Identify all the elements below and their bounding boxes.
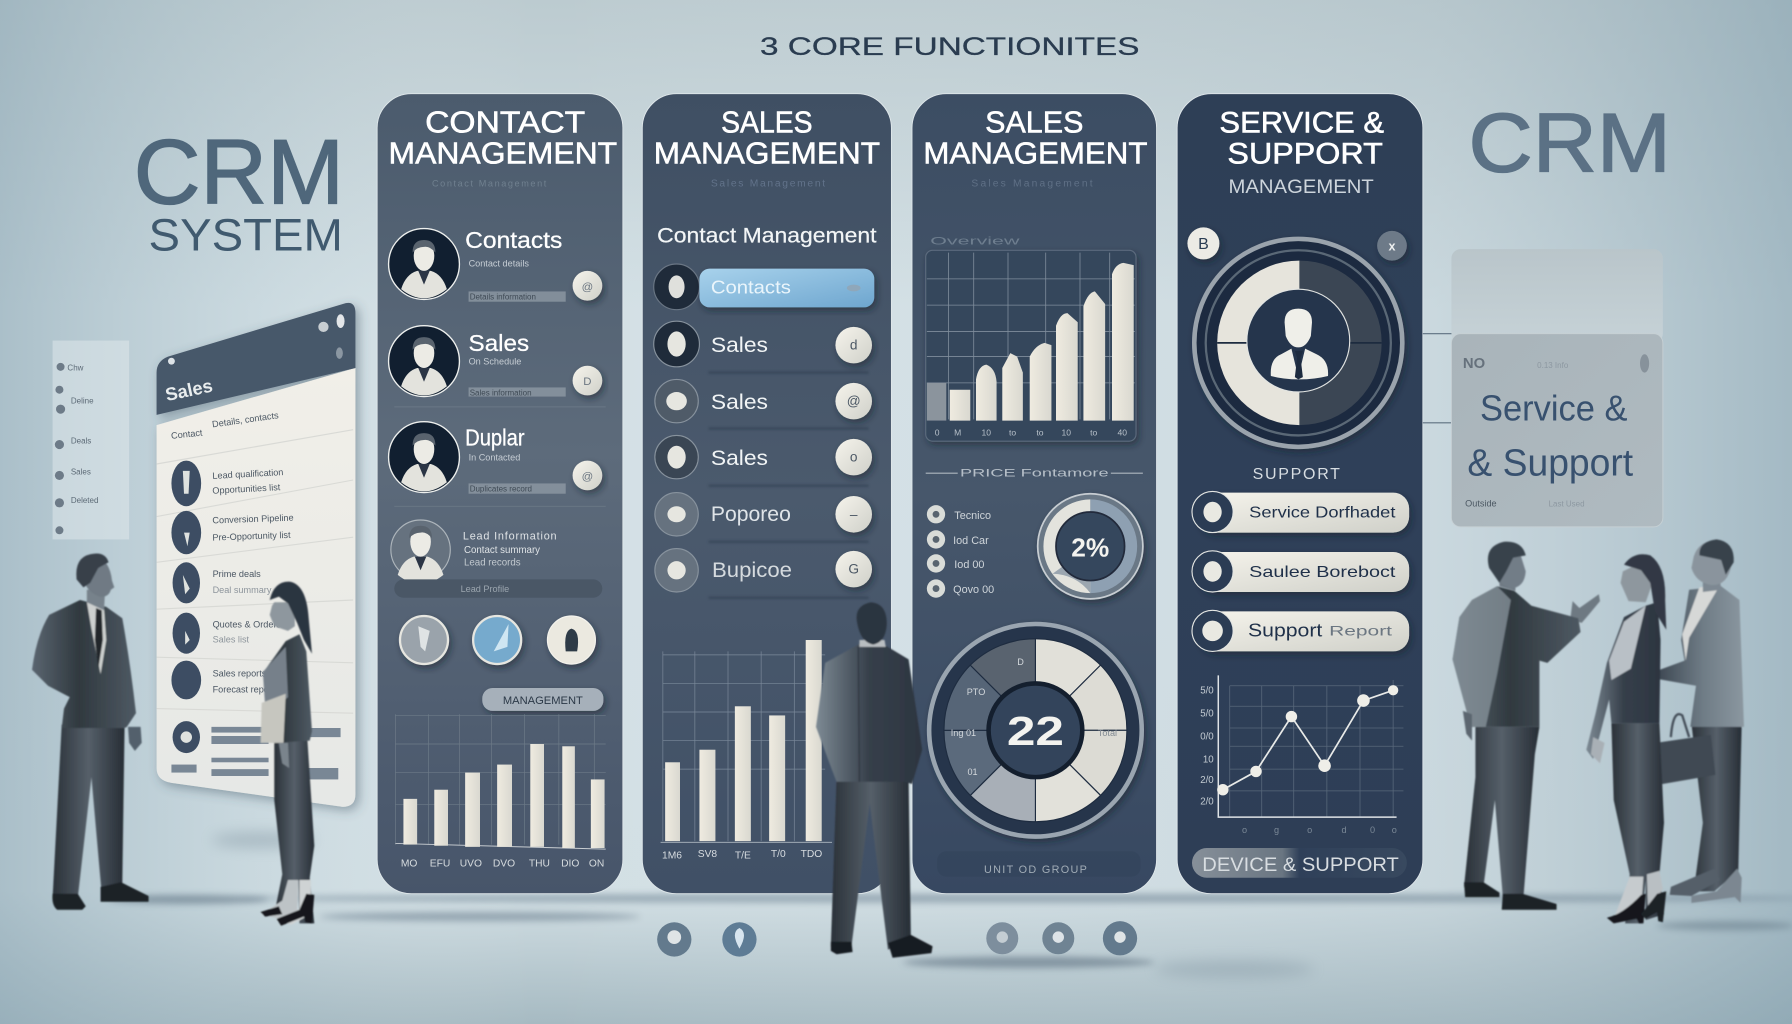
sales rows: o [850, 450, 858, 465]
floor shadows [109, 832, 1792, 978]
heading: CRM System: SYSTEM [149, 209, 343, 260]
window rows: Lead qualification [212, 467, 284, 481]
window rows: Conversion Pipeline [212, 513, 294, 525]
window rows: Forecast report [213, 685, 275, 695]
line chart: 2/0 [1200, 797, 1214, 808]
big dial: 22 [929, 624, 1142, 837]
callout card: service and support: Service & [1480, 388, 1627, 429]
bar chart: contacts: DIO [561, 858, 579, 869]
figure: man with hand in pocket [32, 553, 149, 910]
contact rows: Sales [469, 330, 529, 356]
big dial: 22: 22 [1007, 708, 1064, 754]
figure: man viewed from behind [816, 602, 933, 958]
panel title: SERVICE & [1219, 107, 1384, 140]
callout card: service and support: NO [1463, 356, 1485, 372]
big dial: 22: Ing 01 [951, 728, 976, 738]
window rows: Deal summary [213, 585, 272, 595]
panel title: MANAGEMENT [923, 135, 1148, 170]
growth bar chart [926, 250, 1136, 441]
line chart: o [1307, 825, 1312, 835]
line chart: 10 [1203, 754, 1214, 765]
sales rows: Sales [711, 389, 768, 414]
window rows: Opportunities list [212, 482, 281, 496]
panel: floating sales window [157, 303, 355, 807]
big dial: 22: PTO [967, 687, 985, 697]
panel title: MANAGEMENT [389, 135, 617, 170]
connector lines [1423, 334, 1454, 423]
panel: faint side list: Deline [71, 396, 94, 405]
callout card: service and support: & Support [1467, 441, 1634, 483]
panel: sales management analytics [912, 94, 1157, 894]
big dial: 22: 01 [967, 767, 978, 777]
growth bar chart: 0 [935, 427, 940, 437]
dial segments [944, 639, 1127, 822]
contact row active: Contacts [711, 277, 791, 298]
panel: faint side list: Deals [71, 436, 91, 445]
sales rows: Sales [711, 332, 768, 357]
lead card: Lead Information [463, 530, 557, 542]
dial caption: UNIT OD GROUP [984, 864, 1087, 876]
window rows: Pre-Opportunity list [212, 530, 291, 543]
growth bar chart: M [954, 427, 961, 437]
sales rows: Sales [711, 445, 768, 470]
bar chart: contacts [395, 714, 606, 869]
faint subtitle: Sales Management [711, 178, 825, 189]
legend: Qovo 00 [953, 584, 994, 596]
lead card: Contact summary [464, 545, 540, 556]
line chart: 5/0 [1200, 709, 1214, 720]
person icon [1271, 309, 1328, 379]
legend [927, 505, 994, 598]
contact rows: Duplicates record [470, 484, 532, 493]
contact rows: D [583, 376, 592, 388]
donut: 2%: 2% [1071, 533, 1109, 563]
action buttons [400, 616, 595, 664]
management pill: MANAGEMENT [503, 695, 583, 707]
callout card: service and support: Outside [1465, 498, 1497, 508]
panel: faint side list: Sales [71, 467, 91, 476]
section heading: SUPPORT [1253, 466, 1342, 483]
contact rows: Contact details [469, 258, 529, 268]
lead card: Lead Profile [461, 584, 509, 594]
sales rows: Poporeo [711, 501, 791, 526]
contact rows: In Contacted [469, 453, 520, 463]
line chart: o [1392, 825, 1397, 835]
bar chart: contacts: ON [589, 858, 604, 869]
contact rows: Contacts [465, 227, 562, 253]
panel: sales management [642, 94, 891, 894]
bar chart: contacts: DVO [493, 858, 515, 869]
panel: faint side list: Chw [67, 363, 84, 372]
growth bar chart: 10 [982, 427, 991, 437]
figure group: three colleagues [1453, 539, 1744, 923]
panel: faint side list: Deleted [71, 496, 98, 505]
line chart: 0 [1370, 825, 1375, 835]
legend: Tecnico [954, 510, 991, 522]
bar chart: contacts: THU [529, 858, 550, 869]
panel title: CONTACT [425, 105, 585, 140]
line chart: 0/0 [1200, 731, 1214, 742]
management pill [482, 688, 603, 711]
bar chart: sales: T/0 [771, 849, 786, 860]
growth bar chart: to [1090, 427, 1098, 437]
legend: Iod 00 [954, 559, 984, 571]
donut: 2% [1038, 494, 1143, 599]
lead card [391, 520, 602, 598]
panel title: SUPPORT [1227, 137, 1383, 170]
lead card: Lead records [464, 558, 521, 569]
corner badges: B [1198, 236, 1209, 253]
growth bar chart: to [1009, 427, 1016, 437]
growth bar chart: 40 [1118, 427, 1127, 437]
contact rows: @ [582, 281, 593, 293]
bar chart: contacts: EFU [430, 858, 450, 869]
figure: woman with ponytail [261, 582, 314, 926]
bottom pill [1192, 848, 1407, 878]
growth bar chart: to [1036, 427, 1044, 437]
sales rows: – [850, 507, 858, 522]
chart label: Overview [930, 236, 1021, 248]
contact rows [389, 227, 606, 506]
window rows [157, 410, 353, 779]
line chart: 2/0 [1200, 775, 1214, 786]
panel title: SALES [985, 105, 1083, 140]
contact row active [654, 264, 874, 310]
sub heading: Contact Management [657, 222, 877, 247]
heading: CRM right: CRM [1469, 95, 1671, 189]
growth bar chart: 10 [1062, 427, 1071, 437]
man gesturing [1453, 542, 1600, 910]
line chart: g [1274, 825, 1279, 835]
panel title: MANAGEMENT [654, 135, 880, 170]
window rows: Sales list [213, 634, 250, 644]
panel: service and support [1177, 94, 1423, 894]
window rows: Quotes & Orders [213, 619, 281, 629]
support pills: Report [1329, 623, 1392, 638]
contact rows: Duplar [465, 425, 525, 451]
line chart: o [1242, 825, 1247, 835]
heading: CRM System: CRM [134, 121, 344, 223]
dial with person icon [1194, 239, 1402, 447]
panel: faint side list [53, 341, 129, 539]
contact rows: On Schedule [469, 357, 521, 367]
panel title: SALES [721, 105, 813, 140]
big dial: 22: D [1017, 657, 1024, 667]
window rows: Sales reports [213, 669, 267, 679]
contact rows: @ [582, 471, 593, 483]
icon row: right bottom [986, 921, 1137, 955]
support pills: Support [1248, 620, 1322, 641]
section divider label: PRICE Fontamore [960, 468, 1109, 480]
line chart: 5/0 [1200, 686, 1214, 697]
sales rows: @ [847, 394, 861, 409]
callout card: service and support [1451, 334, 1663, 527]
callout card: service and support: Last Used [1549, 499, 1585, 508]
bar chart: sales: 1M6 [662, 850, 682, 861]
support pills [1192, 491, 1409, 651]
contact rows: Sales information [470, 388, 532, 397]
briefcase [1656, 714, 1715, 785]
bar chart: sales: TDO [801, 849, 822, 860]
panel subtitle: MANAGEMENT [1229, 176, 1374, 198]
woman centre [1586, 554, 1666, 923]
support pills: Saulee Boreboct [1249, 564, 1396, 581]
bottom pill: DEVICE & SUPPORT [1202, 854, 1399, 876]
sales rows: G [848, 562, 859, 577]
legend: Iod Car [953, 535, 989, 547]
faint subtitle: Sales Management [971, 178, 1093, 189]
bar chart: sales: T/E [735, 850, 751, 861]
bar chart: contacts: UVO [460, 858, 482, 869]
corner badges [1187, 227, 1407, 261]
panel title [923, 105, 1148, 170]
callout card: service and support: 0.13 Info [1537, 361, 1569, 370]
sales rows: d [850, 338, 858, 353]
window rows: Prime deals [213, 569, 261, 579]
faint subtitle: Contact Management [432, 178, 547, 188]
window rows: Details, contacts [211, 410, 280, 429]
icon row: left bottom [657, 922, 757, 957]
title: 3 CORE FUNCTIONITES [760, 33, 1139, 61]
dial caption [937, 851, 1141, 877]
panel: contact management [377, 94, 623, 894]
callout card: blank [1451, 249, 1663, 343]
man standing right [1654, 539, 1744, 903]
panel title [654, 105, 880, 170]
bar chart: contacts: MO [401, 858, 417, 869]
support pills: Service Dorfhadet [1249, 505, 1396, 522]
corner badges: x [1388, 239, 1395, 253]
sales rows [654, 321, 872, 598]
line chart [1200, 675, 1403, 835]
panel title [389, 105, 617, 170]
line chart: d [1341, 825, 1347, 835]
bar chart: sales: SV8 [698, 849, 717, 860]
window controls [168, 314, 345, 365]
window heading: Sales [163, 375, 214, 405]
panel title [1219, 107, 1384, 170]
window rows: Contact [171, 428, 203, 441]
contact rows: Details information [470, 292, 536, 301]
big dial: 22: Total [1098, 728, 1117, 738]
sales rows: Bupicoe [712, 557, 792, 582]
bar chart: sales [661, 640, 832, 861]
